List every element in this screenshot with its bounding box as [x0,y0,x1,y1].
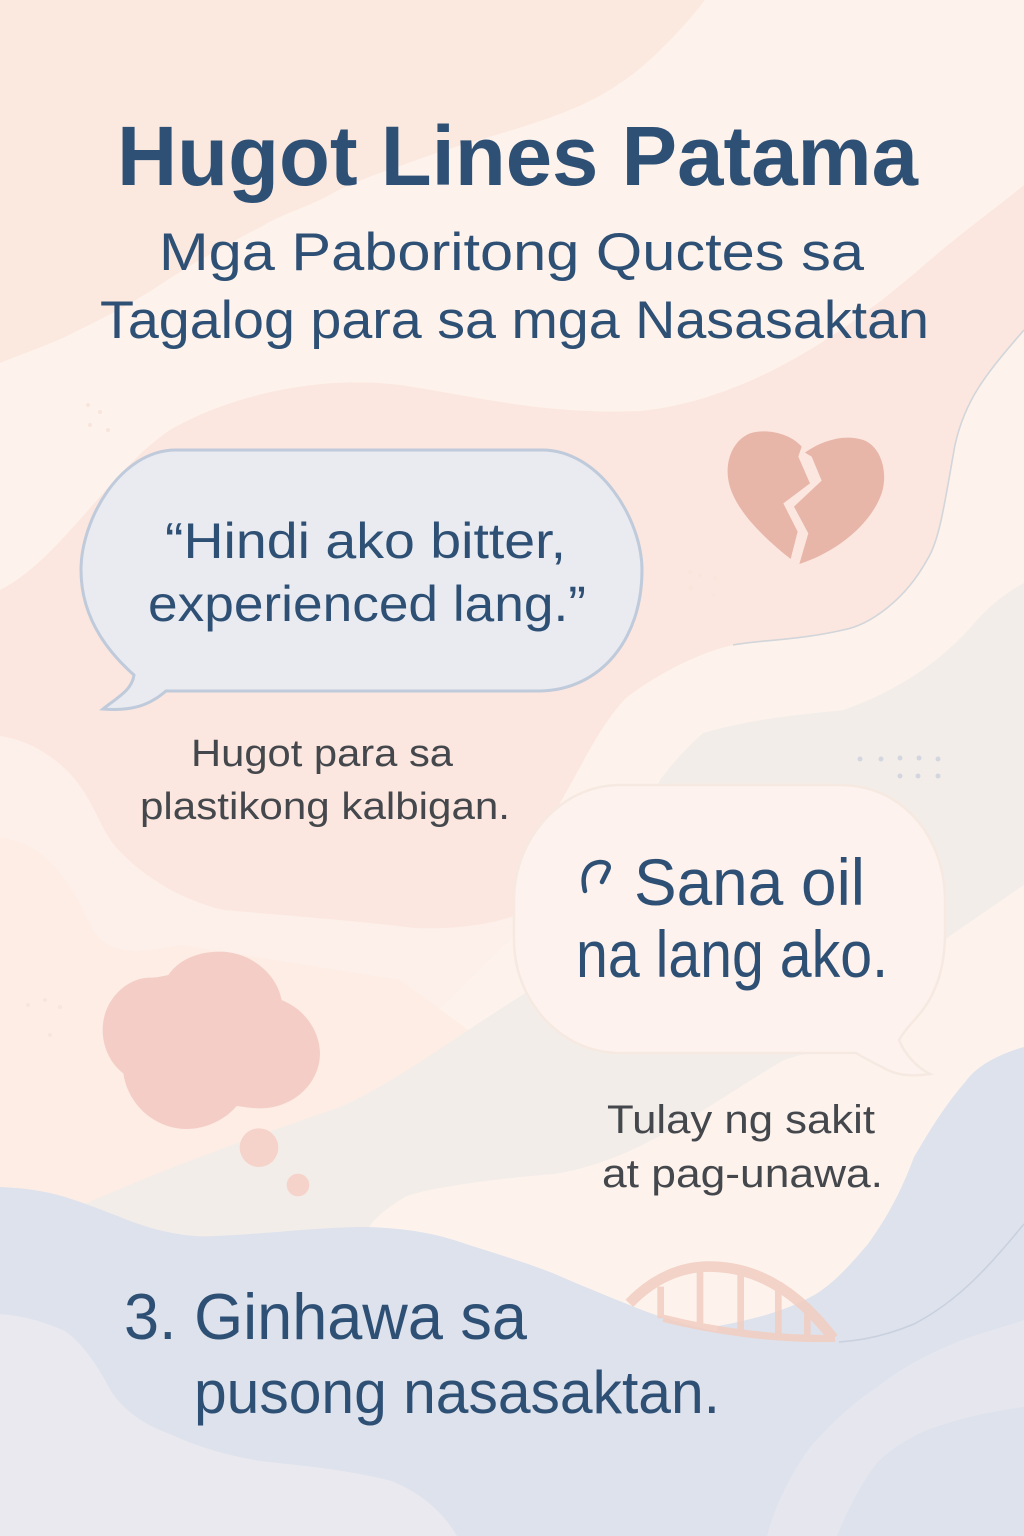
speech bubble one [81,450,642,709]
caption two [602,1098,883,1196]
icon: broken heart [728,431,884,564]
caption one [140,733,510,828]
panel: quote two [514,785,945,1075]
quote text two: na lang ako. [576,917,888,991]
closing line: 3. Ginhawa sa [124,1280,528,1353]
quote text one: experienced lang.” [148,576,586,632]
panel: quote one [81,450,642,709]
closing line: pusong nasasaktan. [194,1359,720,1426]
quote text one: “Hindi ako bitter, [165,513,566,569]
quote text two [576,845,888,991]
subtitle [100,223,929,350]
icon: bridge [629,1267,835,1339]
quote text one [148,513,586,632]
speech bubble two [514,785,945,1075]
caption one: Hugot para sa [191,733,454,775]
subtitle: Tagalog para sa mga Nasasaktan [100,291,929,350]
closing line [124,1280,720,1426]
caption one: plastikong kalbigan. [140,786,510,828]
quote text two: Sana oil [634,845,865,919]
title: Hugot Lines Patama [117,109,919,203]
opening quote mark [584,862,609,891]
caption two: Tulay ng sakit [607,1098,875,1142]
subtitle: Mga Paboritong Quctes sa [159,223,865,282]
caption two: at pag-unawa. [602,1152,883,1196]
icon: thought cloud [103,952,320,1196]
